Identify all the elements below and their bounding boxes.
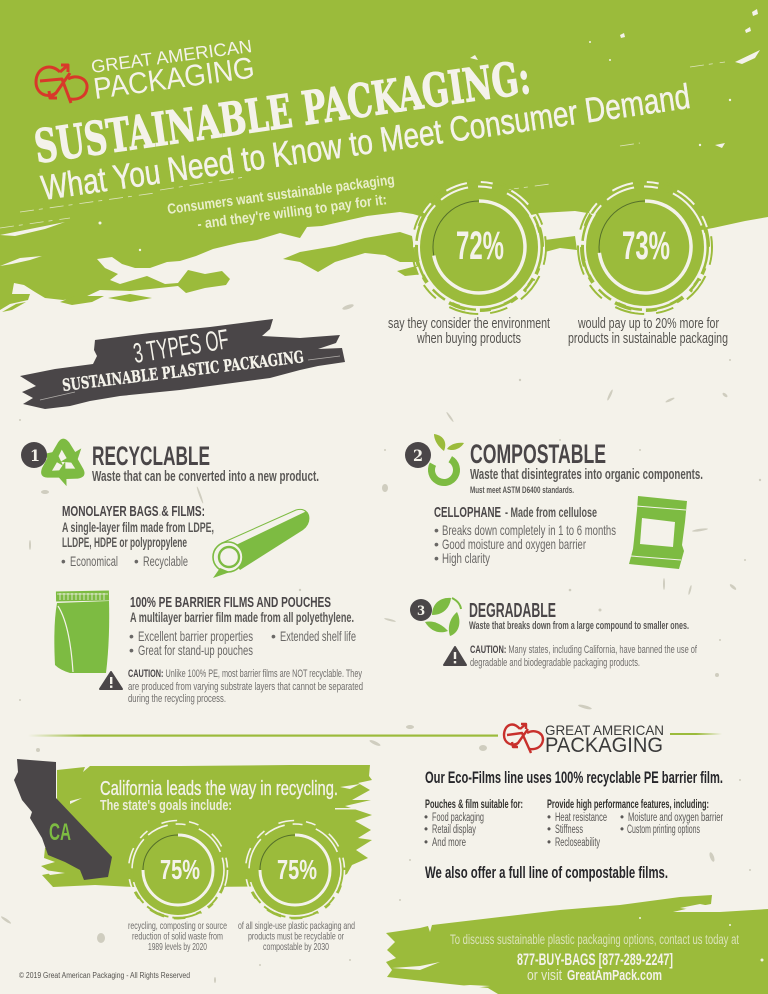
stat caption: 73% [568, 316, 728, 347]
intro text [166, 172, 396, 233]
PE barrier films text: Great for stand-up pouches [138, 642, 253, 658]
caption: packaging goal: products must be recyclable or [248, 930, 344, 942]
banner: 3 types: 3 TYPES OF [131, 323, 231, 369]
eco-films: performance features list [547, 799, 723, 849]
stat circle: 75% packaging: 75% [277, 854, 317, 885]
stat circle: 73% [578, 180, 712, 314]
PE barrier films text [129, 595, 356, 658]
caution: barrier films: are produced from varying substrate layers that cannot be separated [128, 681, 363, 693]
icon: cellophane bag [629, 496, 687, 569]
caption: recycling goal: 1989 levels by 2020 [148, 941, 207, 953]
panel: contact: GreatAmPack.com [567, 967, 662, 984]
eco-films: performance features list: • [620, 824, 624, 836]
PE barrier films text: • [129, 628, 134, 644]
paper flecks [0, 303, 761, 983]
icon: red arrow knot [504, 724, 543, 753]
logo: Great American Packaging (footer) [504, 722, 664, 757]
eco-films: suitable uses list: And more [432, 837, 466, 849]
map: California state [14, 759, 112, 880]
panel: contact [386, 895, 768, 994]
eco-films: performance features list: • [620, 812, 624, 824]
heading: California [100, 778, 338, 814]
stat caption: 72% [388, 316, 550, 347]
monolayer bags and films text: Economical [70, 554, 118, 569]
stat circle: 73%: 73% [622, 224, 670, 268]
cellophane text: - Made from cellulose [505, 504, 597, 520]
PE barrier films text: • [129, 642, 134, 658]
icon: red arrow knot [36, 65, 87, 103]
icon: apple with leaves [427, 434, 464, 487]
stat caption: 73%: would pay up to 20% more for [577, 316, 719, 332]
caution: degradable [444, 644, 698, 669]
heading: California: The state's goals include: [100, 797, 232, 814]
intro text: Consumers want sustainable packaging [166, 172, 396, 218]
cream scratches [0, 9, 760, 266]
section: recyclable: Waste that can be converted into a new product. [92, 469, 319, 485]
banner: 3 types [20, 319, 345, 409]
caution: barrier films: CAUTION: Unlike 100% PE, most barrier films are NOT recyclable. They [128, 668, 362, 680]
caution: degradable: degradable and biodegradable packaging products. [470, 657, 640, 669]
stat circle: 75% recycling: 75% [160, 854, 200, 885]
caption: recycling goal [128, 920, 227, 953]
PE barrier films text: 100% PE BARRIER FILMS AND POUCHES [130, 595, 331, 611]
cellophane text: Breaks down completely in 1 to 6 months [442, 522, 616, 538]
copyright: © 2019 Great American Packaging - All Rights Reserved [19, 971, 190, 980]
logo: Great American Packaging (header): PACKAGING [92, 52, 256, 106]
stat caption: 72%: when buying products [416, 331, 521, 347]
logo: Great American Packaging (footer): PACKAGING [545, 734, 663, 757]
monolayer bags and films text [61, 503, 214, 569]
eco-films: suitable uses list: • [424, 824, 428, 836]
banner: 3 types: SUSTAINABLE PLASTIC PACKAGING [61, 347, 305, 395]
monolayer bags and films text: A single-layer film made from LDPE, [62, 520, 214, 535]
number badge 3: 3 [417, 604, 425, 619]
caution: barrier films: during the recycling process. [128, 693, 226, 705]
section: recyclable: RECYCLABLE [92, 441, 210, 471]
logo: Great American Packaging (footer): GREAT AMERICAN [545, 722, 664, 738]
PE barrier films text: Excellent barrier properties [138, 628, 253, 644]
caption: recycling goal: reduction of solid waste from [132, 930, 223, 942]
monolayer bags and films text: LLDPE, HDPE or polypropylene [62, 535, 187, 550]
icon: stand-up pouch [54, 591, 109, 673]
icon: warning triangle [100, 672, 122, 689]
section: degradable: DEGRADABLE [469, 600, 556, 622]
monolayer bags and films text: • [61, 554, 66, 569]
logo: Great American Packaging (header) [36, 36, 256, 106]
eco-films: performance features list: Stiffness [555, 824, 583, 836]
cellophane text: • [434, 550, 439, 566]
section: compostable [405, 434, 703, 496]
panel: contact: 877-BUY-BAGS [877-289-2247] [517, 951, 673, 969]
caption: recycling goal: recycling, composting or source [128, 920, 227, 932]
cellophane text: • [434, 536, 439, 552]
eco-films: performance features list: Recloseability [555, 837, 600, 849]
green header background [0, 0, 768, 312]
section: recyclable [21, 439, 319, 491]
compostable films statement: We also offer a full line of compostable films. [425, 864, 668, 882]
monolayer bags and films text: • [134, 554, 139, 569]
stat circle: 72%: 72% [456, 224, 504, 268]
stat circle: 75% packaging [246, 820, 344, 920]
PE barrier films text: • [271, 628, 276, 644]
heading: California: California leads the way in recycling. [100, 778, 338, 800]
cellophane text: High clarity [442, 550, 490, 566]
cellophane text: • [434, 522, 439, 538]
icon: warning triangle [444, 647, 466, 665]
icon: recycle symbol [33, 439, 91, 491]
cellophane text: Good moisture and oxygen barrier [442, 536, 586, 552]
stat circle: 72% [412, 180, 546, 314]
caption: packaging goal: compostable by 2030 [263, 941, 329, 953]
eco-films: performance features list: Custom printing options [627, 824, 700, 836]
eco-films: performance features list: • [547, 824, 551, 836]
caption: packaging goal: of all single-use plastic packaging and [238, 920, 355, 932]
number badge 1 [21, 442, 47, 468]
number badge 3 [410, 599, 432, 621]
eco-films: suitable uses list: • [424, 837, 428, 849]
section: compostable: COMPOSTABLE [470, 439, 606, 469]
eco-films: suitable uses list [424, 799, 523, 849]
eco-films: suitable uses list: Food packaging [432, 812, 484, 824]
eco-films: suitable uses list: Retail display [432, 824, 476, 836]
number badge 2: 2 [413, 446, 423, 465]
monolayer bags and films text: Recyclable [143, 554, 188, 569]
title: SUSTAINABLE PACKAGING: [31, 50, 534, 174]
number badge 1: 1 [30, 446, 40, 465]
eco-films: performance features list: Moisture and oxygen barrier [628, 812, 723, 824]
cellophane text: CELLOPHANE [434, 504, 501, 521]
section: degradable [410, 598, 689, 636]
icon: film roll [213, 509, 309, 578]
section: compostable: Must meet ASTM D6400 standards. [470, 485, 574, 496]
eco-films: performance features list: • [547, 812, 551, 824]
eco-films: suitable uses list: • [424, 812, 428, 824]
eco-films: performance features list: Heat resistance [555, 812, 607, 824]
icon: leaf cycle [425, 598, 461, 636]
panel: California [14, 759, 372, 920]
cellophane text [434, 504, 616, 566]
eco-films: performance features list: • [547, 837, 551, 849]
eco-films: suitable uses list: Pouches & film suitable for: [425, 799, 523, 811]
panel: contact: or visit [527, 967, 563, 984]
PE barrier films text: Extended shelf life [280, 628, 356, 644]
monolayer bags and films text: MONOLAYER BAGS & FILMS: [62, 503, 205, 520]
caution: barrier films [100, 668, 363, 705]
map: California state: CA [49, 819, 71, 846]
stat circle: 75% recycling [128, 820, 228, 920]
stat caption: 72%: say they consider the environment [388, 316, 550, 332]
PE barrier films text: A multilayer barrier film made from all polyethylene. [130, 610, 354, 625]
intro text: - and they're willing to pay for it: [196, 192, 388, 233]
logo: Great American Packaging (header): GREAT AMERICAN [90, 36, 253, 77]
number badge 2 [405, 442, 431, 468]
caption: packaging goal [238, 920, 355, 953]
